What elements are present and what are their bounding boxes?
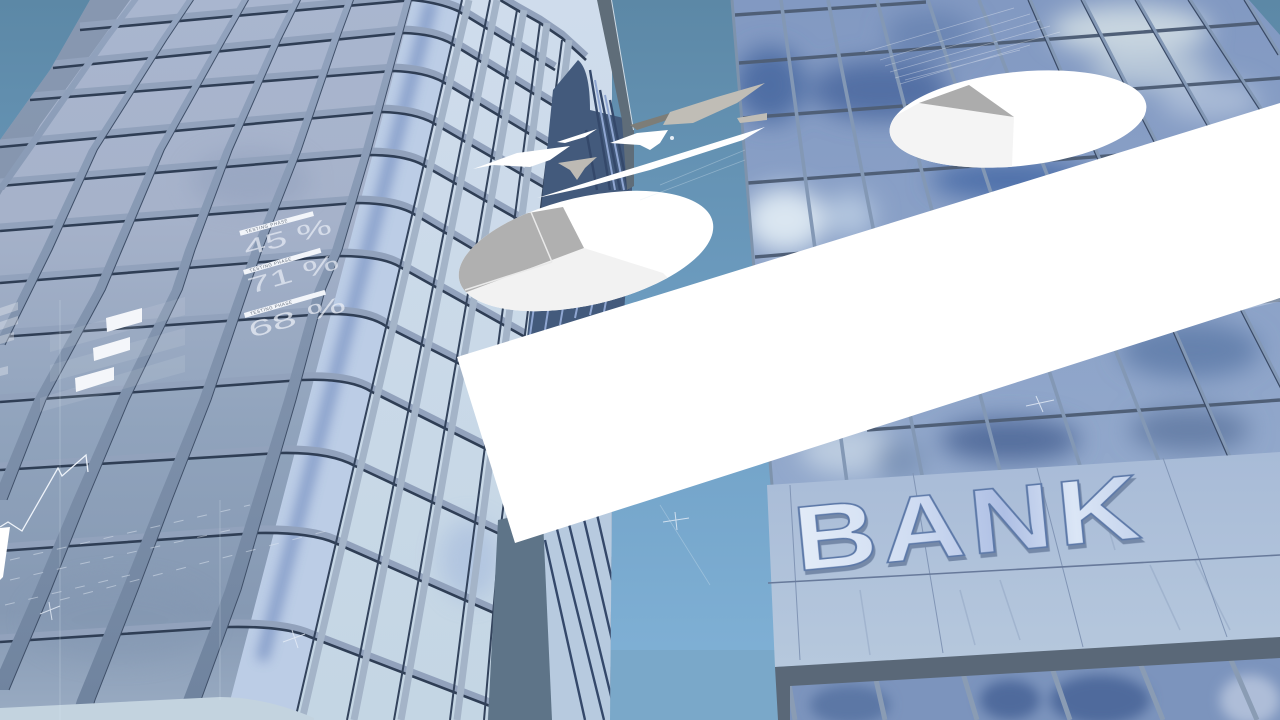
white bar 2 bbox=[93, 337, 130, 361]
percentage readouts bbox=[239, 208, 349, 343]
label bar text: TESTING PHASE bbox=[250, 299, 293, 316]
stone panel bbox=[767, 452, 1280, 667]
left tower bbox=[0, 0, 634, 720]
bank stone fascia bbox=[767, 452, 1280, 720]
light slice bbox=[466, 248, 668, 312]
value: 68 % bbox=[245, 291, 349, 343]
far facade lower tone bbox=[488, 510, 556, 720]
dashed data streaks bbox=[5, 505, 330, 605]
lower window glass bbox=[790, 658, 1280, 720]
large white diagonal band bbox=[457, 103, 1280, 543]
lower window reflections bbox=[810, 675, 1280, 720]
map landmass greenland bbox=[557, 129, 597, 143]
thin guide lines bbox=[60, 150, 745, 720]
pie base bbox=[447, 169, 725, 333]
left facade glass bbox=[0, 0, 440, 720]
podium slab bbox=[0, 697, 314, 720]
far facade light stripes bbox=[530, 80, 624, 335]
bar chart translucent bbox=[0, 297, 185, 412]
line chart bbox=[0, 455, 88, 531]
mullion shadow edges bbox=[5, 0, 412, 720]
stone seams bbox=[790, 458, 1227, 660]
bank sign lettering: BANK bbox=[789, 455, 1149, 591]
map long white strip bbox=[537, 127, 765, 198]
label bar text: TESTING PHASE bbox=[249, 256, 292, 273]
corner reflection streak bbox=[262, 0, 432, 660]
white bar 1 bbox=[106, 308, 142, 332]
value: 71 % bbox=[244, 249, 342, 299]
map landmass south america bbox=[558, 157, 597, 180]
pie slices bbox=[458, 207, 668, 312]
left facade mullions bbox=[0, 0, 412, 720]
mullions bbox=[781, 0, 1280, 490]
faint reflected streaks bbox=[1243, 298, 1280, 310]
map landmass north america bbox=[473, 146, 570, 169]
mullion shadow edges bbox=[1028, 0, 1280, 490]
map dark landmass bbox=[630, 113, 670, 130]
label bar bbox=[243, 248, 321, 275]
right facade glass bbox=[298, 0, 612, 720]
curved corner glass bbox=[225, 0, 462, 720]
column highlight bbox=[612, 0, 634, 130]
map small island bbox=[670, 136, 674, 140]
readout 68 percent bbox=[244, 285, 349, 343]
map landmass asia bbox=[663, 83, 765, 125]
white tab left edge bbox=[0, 527, 10, 580]
floor dark edges bbox=[0, 0, 586, 706]
label bar bbox=[244, 290, 326, 318]
floor bands bbox=[0, 0, 586, 702]
far facade glass stripes bbox=[543, 500, 612, 720]
data grid lines bbox=[865, 8, 1060, 84]
right tower glass bbox=[720, 0, 1280, 500]
bank lower windows bbox=[790, 658, 1280, 720]
slice highlight lines bbox=[465, 205, 552, 290]
pie base bbox=[885, 59, 1151, 179]
readout 45 percent bbox=[239, 208, 334, 261]
sky reflection on lower panes bbox=[200, 156, 497, 598]
white bar 3 bbox=[75, 367, 114, 392]
far facade stripe lines bbox=[545, 70, 628, 720]
pie chart centre bbox=[458, 190, 714, 312]
map landmass australia bbox=[737, 113, 767, 123]
right tower edge bbox=[732, 0, 772, 485]
cloud reflections bbox=[735, 5, 1260, 480]
grey side column bbox=[597, 0, 634, 190]
label bar bbox=[239, 211, 314, 236]
lower window mullions bbox=[790, 660, 1260, 720]
horizon band bbox=[600, 650, 780, 720]
horizontal seam bbox=[768, 555, 1280, 583]
curved glass along silhouette bbox=[0, 0, 130, 195]
world map bbox=[473, 83, 767, 198]
label bar text: TESTING PHASE bbox=[245, 218, 289, 234]
grey slice bbox=[458, 207, 584, 292]
grey slice bbox=[919, 85, 1014, 117]
value: 45 % bbox=[241, 213, 334, 261]
ghost bars bbox=[40, 297, 185, 412]
glass base bbox=[720, 0, 1280, 500]
readout 71 percent bbox=[243, 244, 342, 299]
left ghost stripes bbox=[0, 302, 18, 376]
crosshair markers bbox=[40, 396, 1054, 648]
pie slices bbox=[890, 85, 1014, 168]
floor rows bbox=[735, 2, 1280, 430]
stone veining bbox=[860, 500, 1230, 655]
far facade shadow bbox=[507, 60, 632, 703]
pie chart top right bbox=[890, 70, 1146, 168]
lintel bbox=[775, 637, 1280, 720]
map landmass africa bbox=[610, 130, 668, 150]
light slice bbox=[890, 103, 1014, 168]
right facade mullions bbox=[295, 0, 569, 720]
